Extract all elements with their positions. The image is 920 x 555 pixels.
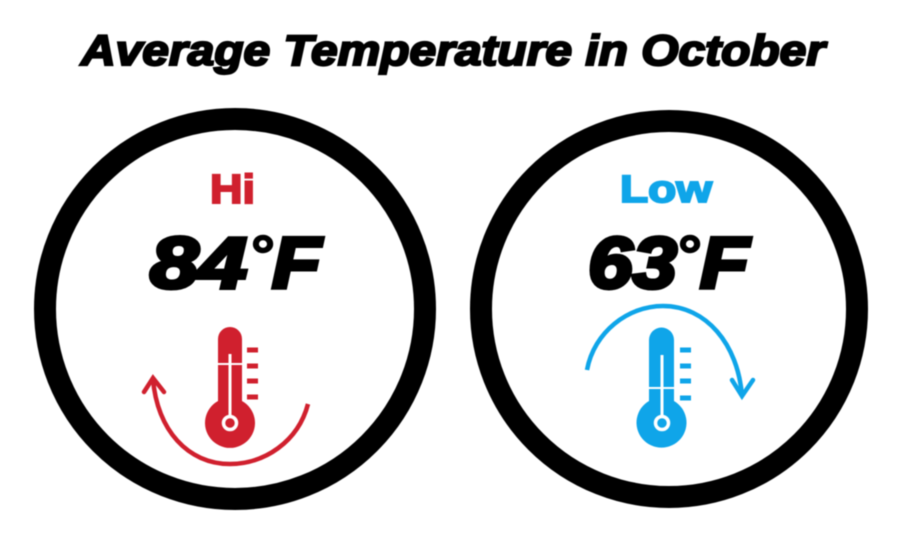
icon: red thermometer bbox=[205, 327, 258, 448]
value: 84°F: 84 bbox=[150, 224, 247, 304]
panel: low temperature bbox=[481, 121, 857, 497]
title: Average Temperature in October bbox=[80, 27, 828, 75]
ring: high bbox=[45, 119, 425, 499]
arrow: rising arc bbox=[144, 378, 308, 464]
value: 84°F: ° bbox=[251, 223, 275, 286]
icon: blue thermometer bbox=[636, 328, 691, 448]
value: 84°F bbox=[150, 223, 323, 304]
value: 84°F: F bbox=[272, 224, 323, 304]
label: Low: Low bbox=[620, 169, 713, 211]
value: 63°F: F bbox=[700, 224, 751, 304]
arrow: falling arc bbox=[587, 306, 753, 396]
label: Hi: Hi bbox=[210, 166, 255, 212]
panel: high temperature bbox=[45, 119, 425, 499]
ring: low bbox=[481, 121, 857, 497]
value: 63°F: ° bbox=[678, 223, 702, 286]
value: 63°F: 63 bbox=[588, 224, 677, 304]
value: 63°F bbox=[588, 223, 751, 304]
